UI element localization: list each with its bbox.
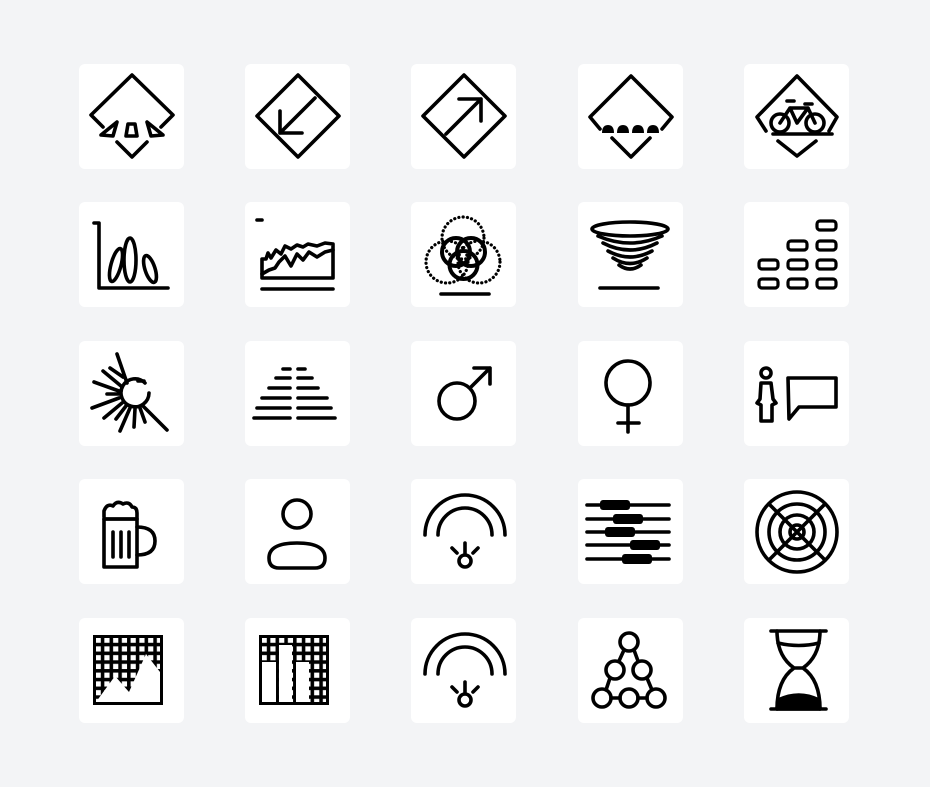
tile: grid mountain chart bbox=[79, 618, 184, 723]
tile: grill target bbox=[744, 479, 849, 584]
tile: male symbol bbox=[411, 341, 516, 446]
tile: grid columns bbox=[245, 618, 350, 723]
tile: female symbol bbox=[578, 341, 683, 446]
tile: venn circles bbox=[411, 202, 516, 307]
tile: diamond speed bumps bbox=[578, 64, 683, 169]
tile: sun rays bbox=[79, 341, 184, 446]
tile: hourglass bbox=[744, 618, 849, 723]
tile: woman speech bubble bbox=[744, 341, 849, 446]
tile: diamond arrow down-left bbox=[245, 64, 350, 169]
tile: arcs with light bbox=[411, 479, 516, 584]
tile: diamond bicycle bbox=[744, 64, 849, 169]
tile: tree of circles bbox=[578, 618, 683, 723]
tile: pyramid lines bbox=[245, 341, 350, 446]
tile: diamond arrow up-right bbox=[411, 64, 516, 169]
tile: block levels bbox=[744, 202, 849, 307]
tile: diamond road narrowing bbox=[79, 64, 184, 169]
tile: tornado bbox=[578, 202, 683, 307]
tile: user profile bbox=[245, 479, 350, 584]
tile: arcs with light 2 bbox=[411, 618, 516, 723]
tile: beer mug bbox=[79, 479, 184, 584]
tile: area chart bbox=[245, 202, 350, 307]
tile: sliders bbox=[578, 479, 683, 584]
tile: bar ellipses chart bbox=[79, 202, 184, 307]
